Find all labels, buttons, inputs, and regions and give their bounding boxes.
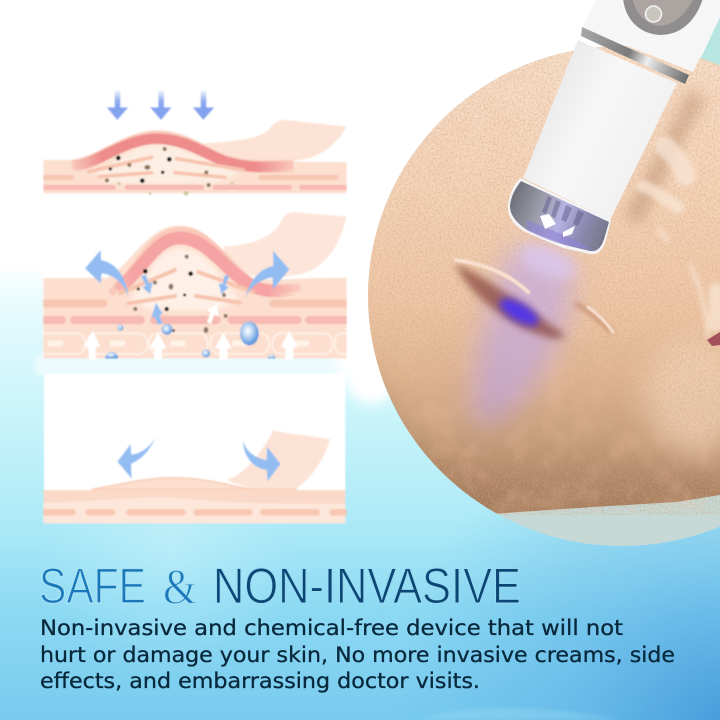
white panel behind diagrams bbox=[43, 60, 347, 357]
body text: hurt or damage your skin, No more invasive creams, side bbox=[40, 643, 675, 667]
diagram 1: pressed skin bbox=[40, 89, 350, 196]
metal band bbox=[581, 27, 689, 84]
skin diagrams bbox=[37, 60, 352, 523]
body text: Non-invasive and chemical-free device that will not bbox=[40, 616, 623, 640]
impurity dots and droplets bbox=[105, 255, 275, 358]
curved arrows bbox=[117, 438, 281, 481]
lower backdrop bbox=[360, 40, 720, 550]
hand skin bbox=[360, 40, 720, 520]
white upward arrows bbox=[84, 304, 298, 360]
purple light glow bbox=[472, 239, 581, 428]
power button bbox=[623, 0, 703, 35]
faint pale scars and fold bbox=[642, 146, 716, 335]
hand crease tip bbox=[707, 332, 720, 346]
metal tip bbox=[508, 178, 611, 254]
body text bbox=[40, 616, 675, 693]
blue outward arrows bbox=[85, 250, 289, 325]
title bbox=[39, 558, 521, 614]
diagram 3: restored skin bbox=[40, 373, 350, 523]
title: & bbox=[163, 558, 197, 614]
body text: effects, and embarrassing doctor visits. bbox=[40, 669, 480, 693]
pen shadow on skin bbox=[625, 90, 705, 225]
diagram 2: impurities pushed out bbox=[37, 212, 352, 360]
photo circle: scarred skin bbox=[360, 40, 720, 550]
main scar bbox=[455, 260, 613, 339]
impurity dots bbox=[105, 147, 233, 196]
title: NON-INVASIVE bbox=[213, 558, 521, 614]
fat cells row bbox=[37, 333, 352, 354]
white pen body bbox=[523, 40, 677, 220]
title: SAFE bbox=[39, 558, 146, 614]
down arrows bbox=[107, 89, 214, 120]
pen device bbox=[508, 0, 720, 254]
